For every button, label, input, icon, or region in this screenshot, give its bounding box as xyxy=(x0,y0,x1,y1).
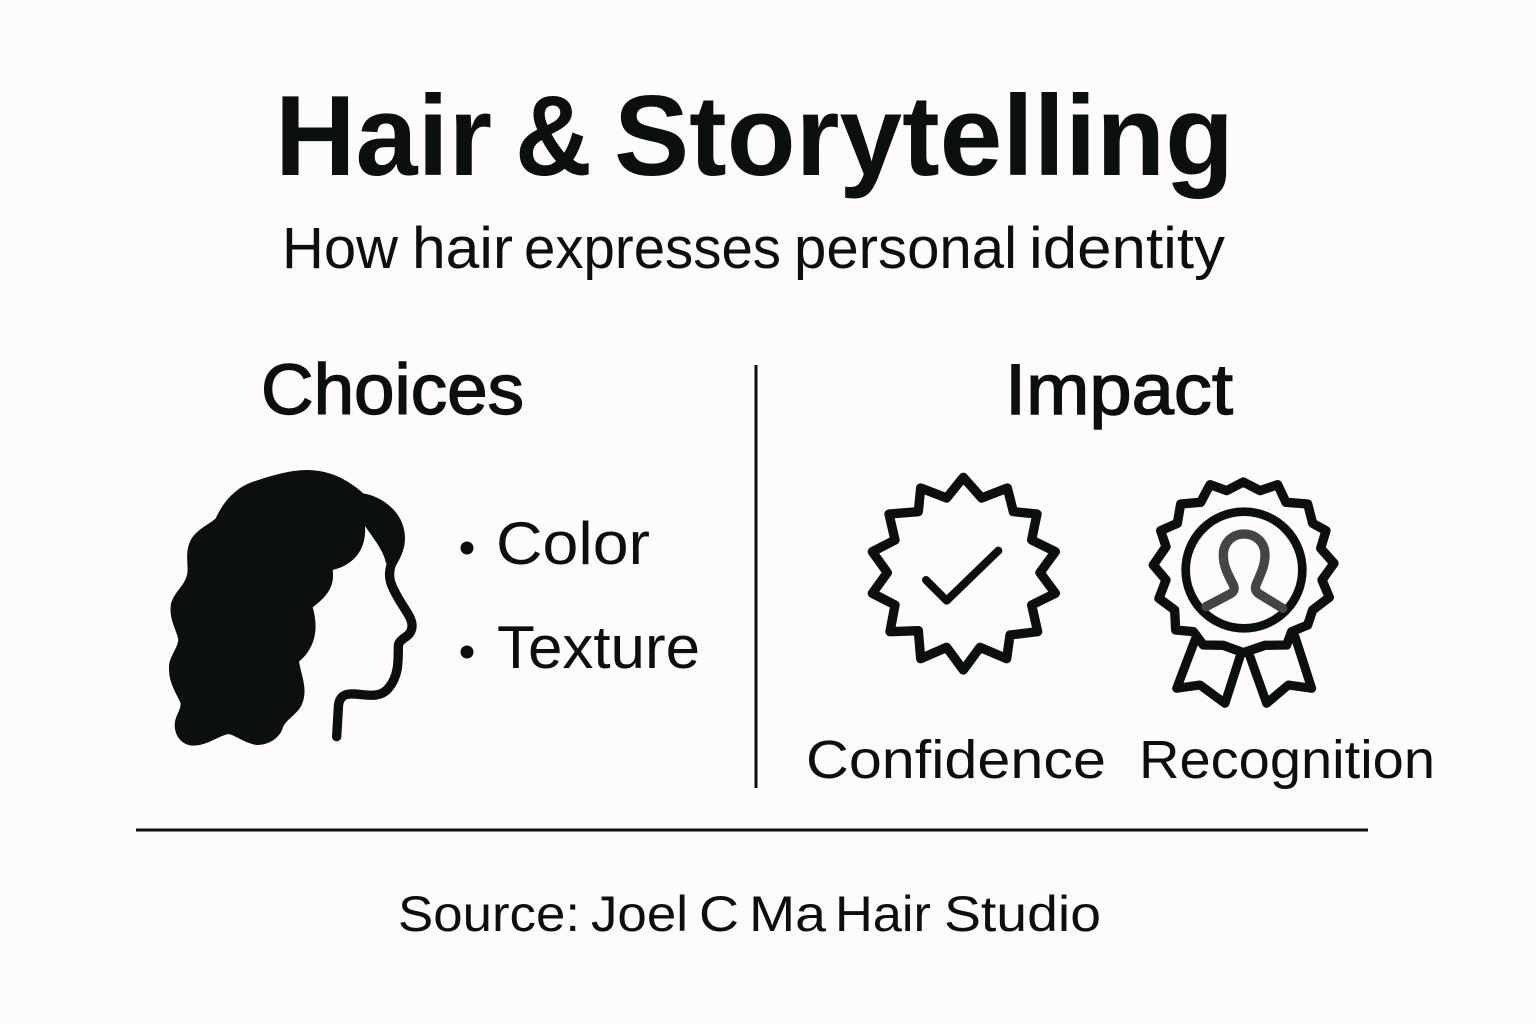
bullet: color xyxy=(460,542,474,554)
source line xyxy=(398,886,1101,942)
subtitle: hair xyxy=(412,216,513,281)
ribbon: left xyxy=(1177,640,1240,703)
label: recognition: Recognition xyxy=(1139,730,1435,790)
horizontal divider xyxy=(136,828,1368,832)
rosette edge xyxy=(1153,482,1334,653)
ribbon: right xyxy=(1250,637,1312,703)
source line: Studio xyxy=(944,886,1101,942)
source line: Joel xyxy=(591,886,688,942)
panel: impact xyxy=(806,351,1435,790)
label: confidence: Confidence xyxy=(806,730,1106,790)
icon: award rosette with person xyxy=(1153,482,1334,703)
subtitle: How xyxy=(282,216,399,281)
heading: impact: Impact xyxy=(1005,351,1233,430)
person outline xyxy=(1206,534,1283,608)
source line: Ma xyxy=(749,886,826,942)
subtitle: personal xyxy=(794,216,1017,281)
icon: starburst badge with check mark xyxy=(872,477,1055,670)
title xyxy=(275,73,1234,200)
subtitle xyxy=(282,216,1225,281)
title: Hair xyxy=(275,73,492,200)
source line: Source: xyxy=(398,886,580,942)
heading: choices: Choices xyxy=(261,351,524,430)
list: hair choices xyxy=(460,510,700,681)
list item: texture: Texture xyxy=(497,614,700,681)
medal ring xyxy=(1186,512,1302,628)
title: & xyxy=(515,73,592,200)
source line: Hair xyxy=(835,886,931,942)
list item: color: Color xyxy=(496,510,650,577)
vertical divider xyxy=(754,365,758,788)
icon: head profile with wavy hair xyxy=(169,470,412,746)
source line: C xyxy=(699,886,739,942)
bullet: texture xyxy=(460,646,474,658)
panel: choices xyxy=(169,351,700,746)
title: Storytelling xyxy=(614,73,1234,200)
subtitle: identity xyxy=(1029,216,1225,281)
subtitle: expresses xyxy=(524,216,781,281)
